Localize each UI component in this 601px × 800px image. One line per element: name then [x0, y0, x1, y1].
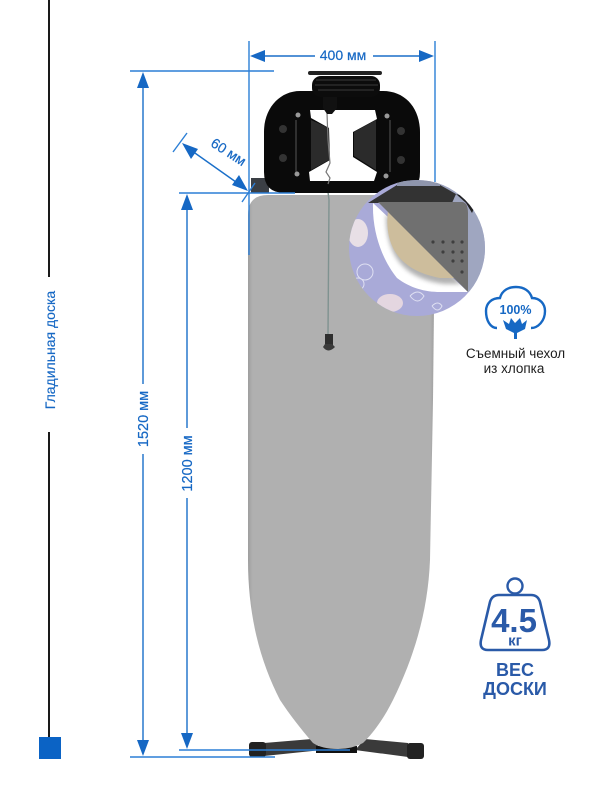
- weight caption: ДОСКИ: [483, 679, 547, 699]
- weight icon: кг: [508, 632, 522, 650]
- cord: [323, 182, 335, 350]
- weight caption: ВЕС: [496, 660, 534, 680]
- ironing board stand: [249, 739, 424, 759]
- inset circle: removable cover detail: [348, 180, 485, 316]
- dimension labels: 1200 мм: [180, 435, 196, 492]
- weight icon: [481, 578, 549, 650]
- dimension arrows: [137, 50, 434, 756]
- side label: ironing board: [39, 0, 61, 759]
- cotton caption: [466, 346, 565, 376]
- dimension labels: 60 мм: [208, 135, 249, 169]
- side label: ironing board: Гладильная доска: [42, 291, 58, 409]
- dimension labels: 400 мм: [320, 47, 366, 63]
- cotton caption: из хлопка: [484, 361, 545, 376]
- dimension labels: 1520 мм: [136, 391, 152, 447]
- weight caption: [483, 660, 547, 699]
- weight icon: 4.5: [491, 602, 537, 639]
- dimension labels: [136, 47, 366, 492]
- ironing board top: [248, 195, 435, 749]
- dimension lines: [130, 41, 435, 757]
- cotton icon: [486, 287, 545, 339]
- cord coil: [308, 71, 382, 114]
- iron rest: black plate: [251, 91, 420, 193]
- cotton icon: 100%: [500, 303, 531, 317]
- cotton caption: Съемный чехол: [466, 346, 565, 361]
